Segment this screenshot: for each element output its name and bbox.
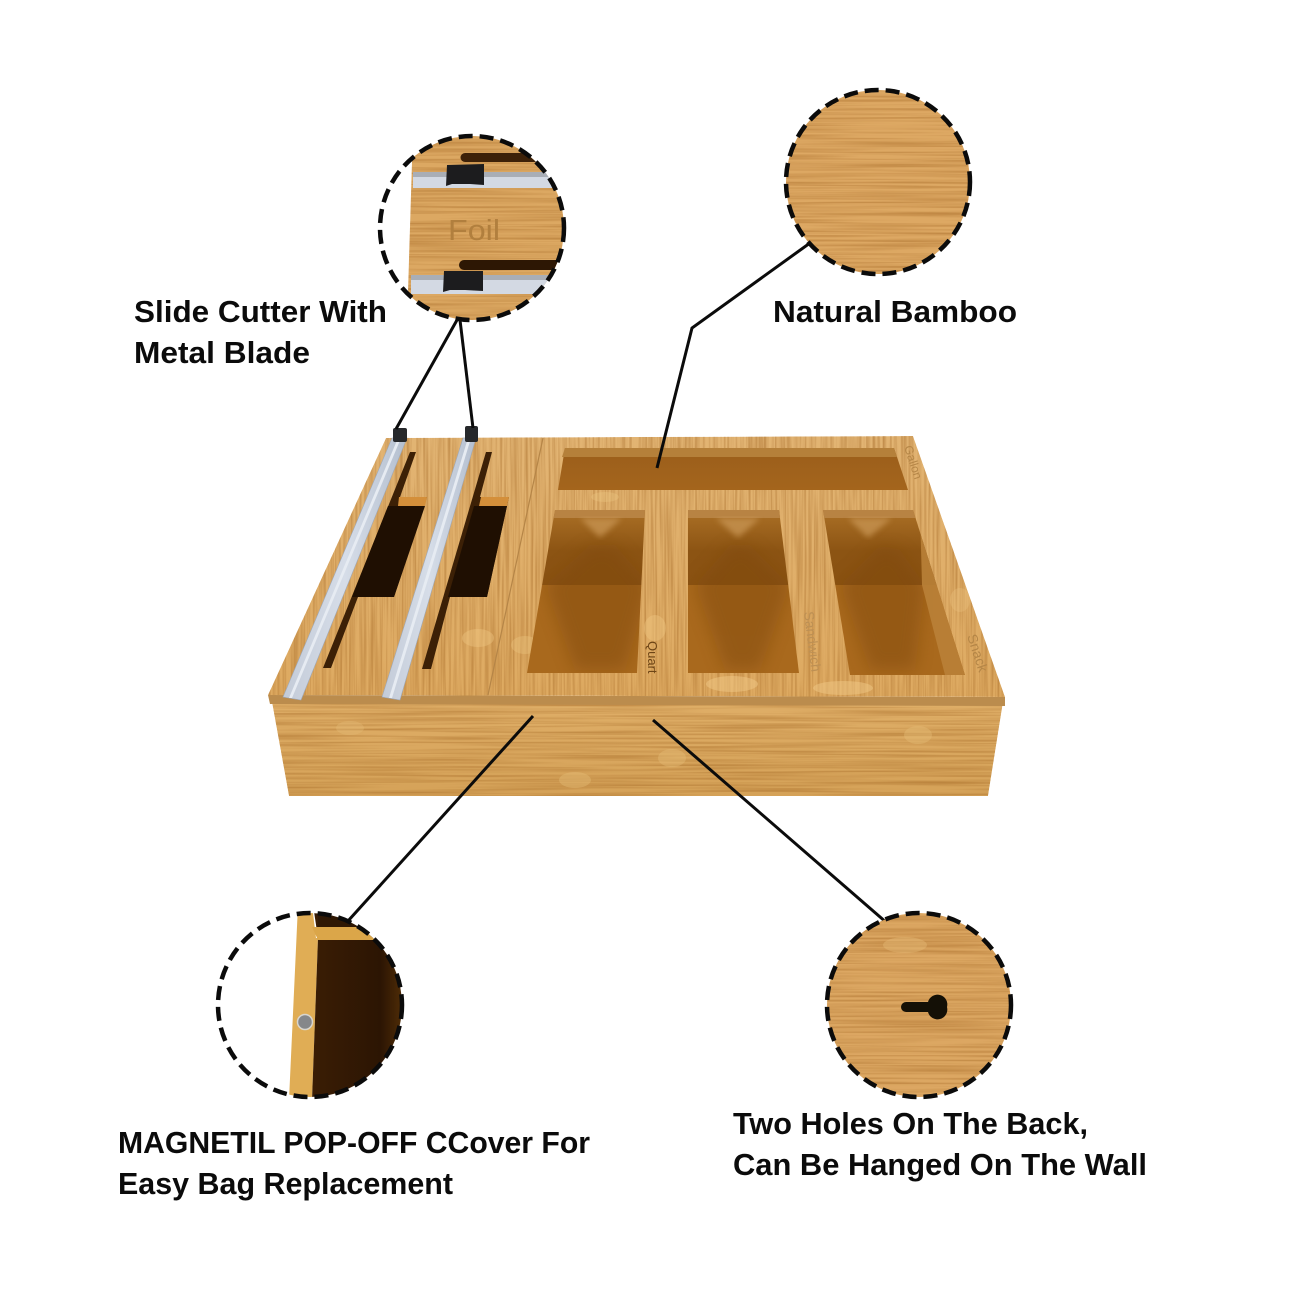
leader line: foil circle to rail two bbox=[460, 320, 473, 428]
engraved label: gallon: Gallon bbox=[901, 444, 925, 481]
leader line: bamboo circle to compartment bbox=[657, 243, 810, 468]
label: slide cutter: Metal Blade bbox=[134, 335, 310, 370]
upper clip bbox=[446, 164, 484, 186]
label: slide cutter: Slide Cutter With bbox=[134, 294, 387, 329]
lower clip bbox=[443, 271, 483, 292]
cutter rail two bbox=[382, 426, 478, 700]
box front face bbox=[270, 702, 1005, 798]
callout circle: magnetic lid detail bbox=[218, 905, 410, 1100]
cutter rail one bbox=[283, 428, 407, 700]
label: magnetic cover bbox=[118, 1125, 590, 1201]
box top face bbox=[268, 436, 1005, 698]
lower rail bbox=[411, 280, 548, 294]
magnet bbox=[298, 1014, 312, 1030]
keyhole bbox=[901, 995, 947, 1019]
slot two bbox=[422, 452, 509, 669]
leader line: magnet circle to lid bbox=[348, 716, 533, 921]
compartment: sandwich bbox=[685, 510, 805, 675]
engraved label: quart: Quart bbox=[645, 641, 660, 674]
slot one bbox=[323, 452, 427, 668]
compartment: quart bbox=[527, 510, 645, 673]
product: bamboo organizer box bbox=[268, 426, 1005, 798]
label: wall holes: Can Be Hanged On The Wall bbox=[733, 1147, 1147, 1182]
callout circle: natural bamboo detail bbox=[785, 89, 971, 275]
label: magnetic cover: MAGNETIL POP-OFF CCover For bbox=[118, 1125, 590, 1160]
leader line: keyhole circle to box front bbox=[653, 720, 887, 923]
label: magnetic cover: Easy Bag Replacement bbox=[118, 1166, 453, 1201]
upper rail bbox=[413, 172, 552, 188]
label: natural bamboo: Natural Bamboo bbox=[773, 294, 1017, 329]
lid front edge bbox=[268, 695, 1005, 706]
compartment: snack bbox=[820, 510, 970, 677]
leader line: foil circle to rail one bbox=[396, 320, 457, 429]
label: slide cutter bbox=[134, 294, 387, 370]
engraved foil text: Foil bbox=[448, 215, 500, 247]
label: wall holes: Two Holes On The Back, bbox=[733, 1106, 1088, 1141]
lid seam bbox=[488, 438, 543, 695]
engraved label: sandwich: Sandwich bbox=[801, 610, 824, 673]
label: wall holes bbox=[733, 1106, 1147, 1182]
upper slot bbox=[460, 153, 536, 162]
top long compartment bbox=[558, 448, 908, 490]
engraved label: snack: Snack bbox=[964, 632, 992, 675]
callout circle: keyhole detail bbox=[826, 912, 1012, 1098]
callout circle: slide cutter detail bbox=[380, 130, 570, 325]
lower slot bbox=[459, 260, 560, 270]
